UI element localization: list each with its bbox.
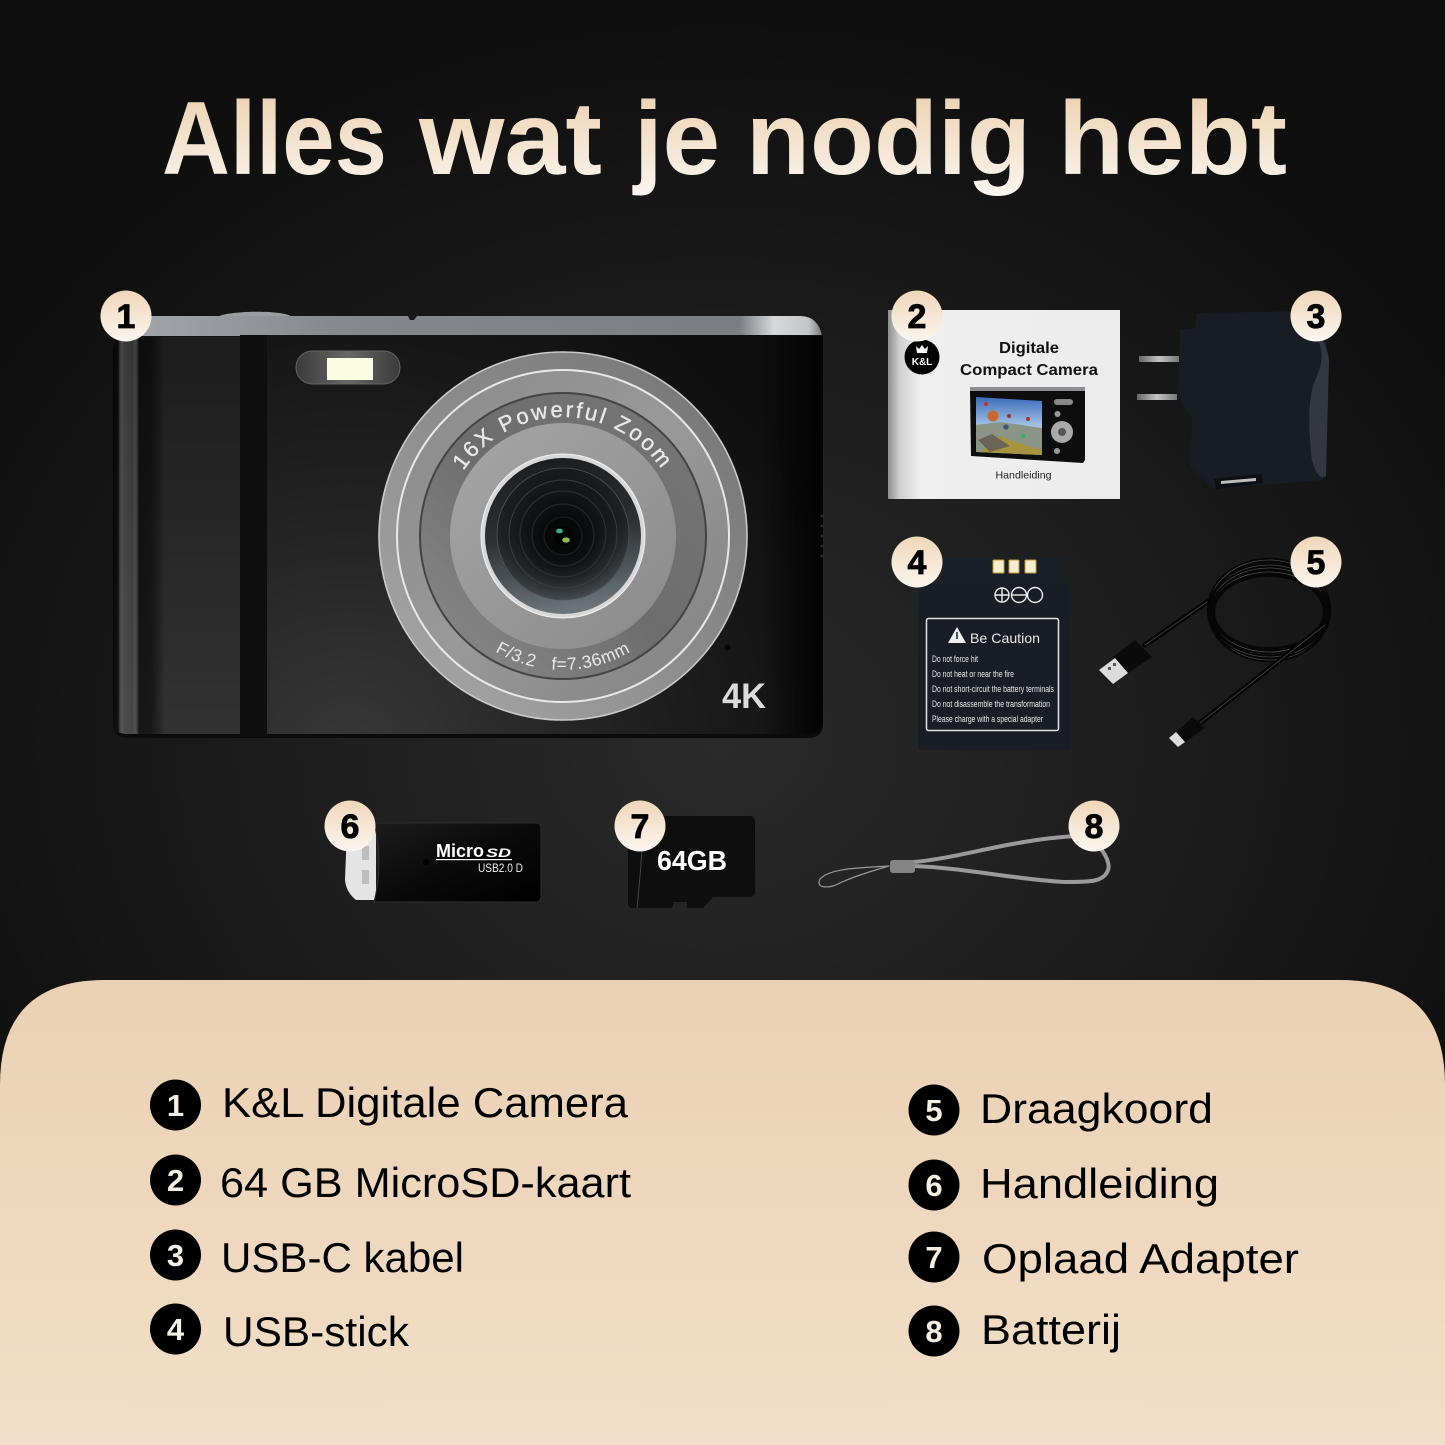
list item 5: Draagkoord [980,1085,1213,1132]
camera [113,312,823,738]
manual camera image [970,387,1085,463]
manual [888,310,1120,499]
adapter body [1178,311,1328,489]
list item 4 [150,1304,410,1355]
reader black body [374,823,541,902]
battery polarity symbols [995,588,1042,602]
title: Alles [162,81,387,197]
badge 7 [614,800,666,852]
list item 6: 6 [925,1168,943,1203]
camera grip groove [240,335,267,736]
badge 5 [1290,536,1342,588]
badge 6: 6 [341,808,359,846]
manual title: Digitale [999,340,1059,357]
USB card reader: SD [486,846,511,860]
list item 2: 2 [167,1163,184,1198]
manual title [960,340,1098,379]
battery warning label: Do not force hit [932,654,978,664]
camera right edge shade [760,336,823,734]
battery warning label: Do not disassemble the transformation [932,699,1050,709]
lens text: zoom: 16X Powerful Zoom [454,402,669,470]
USB-C cable [1099,560,1329,747]
warning triangle [948,627,966,643]
manual logo: K&L [912,357,932,368]
USB-C plug [1169,717,1205,747]
battery warning label: Do not short-circuit the battery terminals [932,684,1054,694]
list item 7: 7 [925,1240,943,1275]
charger adapter [1137,311,1329,489]
reader label: Micro [436,841,484,861]
badge 1: 1 [117,298,135,336]
list item 7 [908,1232,1299,1282]
title [162,81,1287,197]
list item 4: 4 [167,1312,185,1347]
battery contacts [993,560,1036,573]
list item 8: 8 [925,1314,943,1349]
camera 4K mark: 4K [722,677,766,716]
speaker holes [821,515,823,557]
USB card reader [345,823,541,902]
badge 5: 5 [1307,544,1325,582]
list item 2: 64 GB MicroSD-kaart [220,1159,631,1206]
list item 3: USB-C kabel [221,1234,464,1281]
strap loop [819,866,889,887]
badge 3: 3 [1307,298,1325,336]
list item 6 [908,1160,1219,1210]
adapter highlight [1309,336,1329,478]
reader white plug [345,828,376,900]
battery [918,558,1071,750]
adapter USB port [1214,474,1263,489]
list item 5 [908,1084,1213,1136]
badge 3 [1290,290,1342,342]
list item 1: 1 [167,1088,184,1123]
cable lines [1145,602,1207,645]
title: wat [418,81,602,197]
badge 2: 2 [908,298,926,336]
battery body [918,583,1071,750]
manual title: Compact Camera [960,362,1098,379]
microSD card [628,816,755,908]
manual logo [904,340,940,374]
battery warning label: Do not heat or near the fire [932,669,1014,679]
battery top part [943,558,1063,584]
list item 5: 5 [925,1093,943,1128]
list item 4: USB-stick [223,1308,410,1355]
badge 8: 8 [1085,808,1103,846]
camera lens [378,351,748,721]
list item 8: Batterij [981,1306,1121,1353]
badge 8 [1068,800,1120,852]
camera base lip [113,335,823,738]
top bar notch [408,316,417,320]
list item 3: 3 [167,1238,184,1273]
USB-A plug [1099,640,1152,684]
microSD label: 64GB [657,845,727,876]
title: nodig [746,81,1031,197]
right list [908,1084,1299,1356]
camera shutter button [218,312,292,317]
battery warning label: Please charge with a special adapter [932,714,1043,724]
camera grip [113,337,240,734]
badge 6 [324,800,376,852]
strap cord [914,836,1109,882]
battery warning label: Be Caution [970,630,1040,646]
camera microphone [724,644,730,650]
list item 6: Handleiding [980,1160,1219,1207]
manual footer: Handleiding [996,470,1052,482]
camera grip highlight [113,337,165,734]
badge 4 [892,536,942,588]
strap collar [890,860,915,873]
wrist strap [819,836,1109,887]
camera top bar [135,316,822,336]
USB card reader: USB2.0 D [478,863,523,875]
title: hebt [1058,81,1287,197]
item badges [100,290,1342,852]
adapter prongs [1137,356,1179,400]
left list [150,1079,631,1355]
list item 8 [908,1306,1121,1356]
title: je [632,81,720,197]
list item 1: K&L Digitale Camera [222,1079,629,1126]
camera flash [296,351,400,384]
cable coil [1209,560,1329,660]
lens text: aperture: F/3.2 f=7.36mm [496,642,630,670]
badge 4: 4 [908,544,927,582]
bottom panel [0,980,1445,1445]
list item 7: Oplaad Adapter [982,1235,1299,1282]
battery warning label [926,618,1058,730]
badge 7: 7 [631,808,649,846]
badge 1 [100,290,152,342]
camera body [240,335,823,734]
badge 2 [892,290,942,342]
